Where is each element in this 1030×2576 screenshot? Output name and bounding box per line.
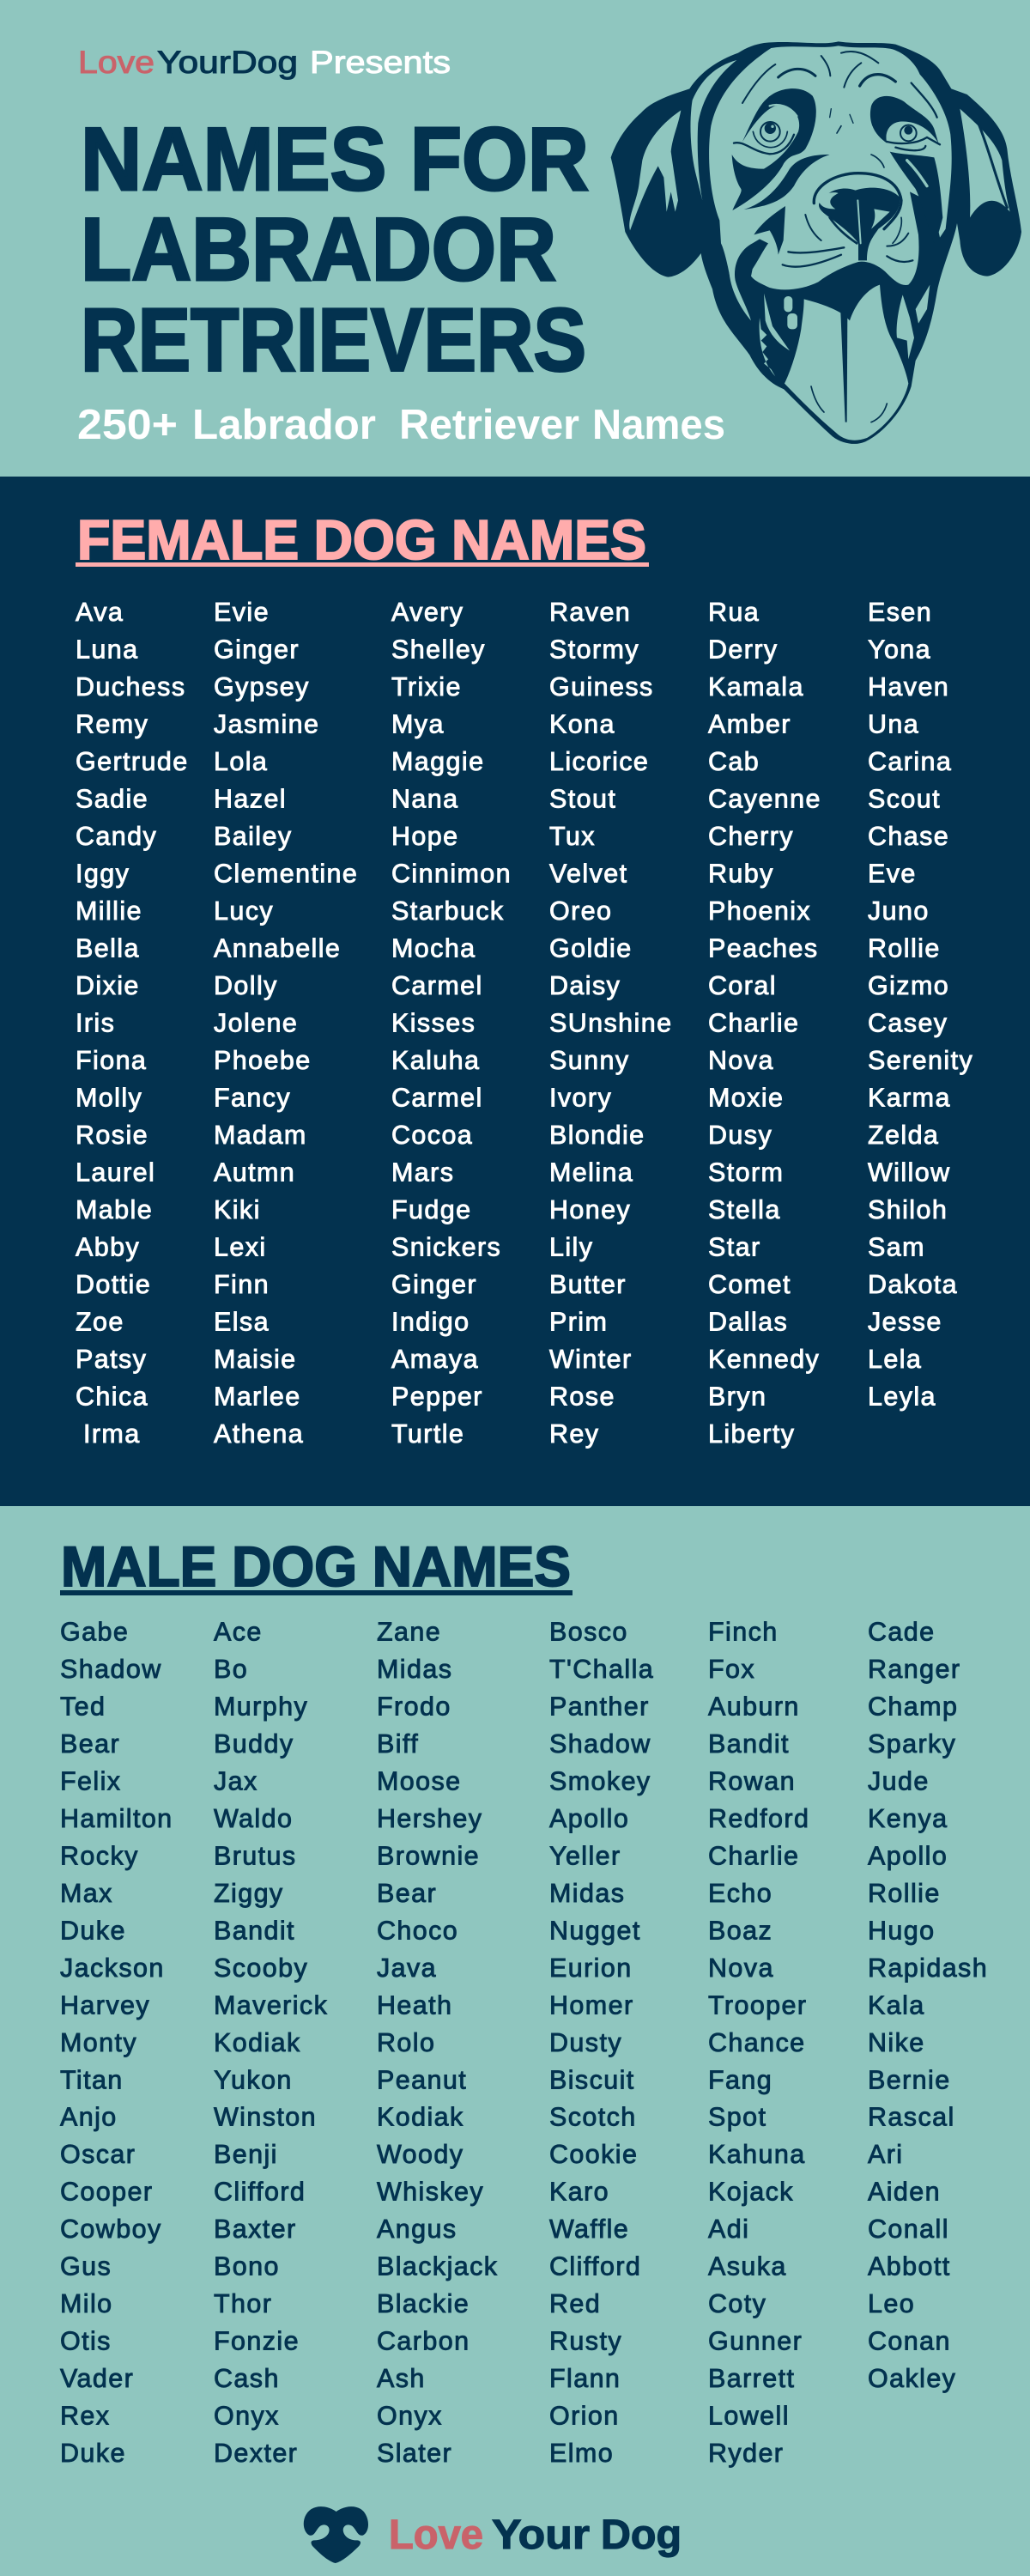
male names column 2: Kodiak	[214, 2028, 301, 2057]
male names column 6: Hugo	[868, 1916, 936, 1945]
male names column 2: Onyx	[214, 2402, 280, 2431]
female names column 6: Una	[868, 709, 919, 738]
female names column 1: Irma	[83, 1419, 141, 1449]
male names column 1: Bear	[60, 1729, 120, 1759]
male names column 6: Cade	[868, 1618, 936, 1647]
male names column 4: Rusty	[549, 2327, 622, 2356]
female names column 6: Eve	[868, 859, 917, 888]
footer logo: Love Your Dog	[304, 2506, 682, 2563]
female names column 5: Comet	[708, 1270, 791, 1299]
male names column 6: Champ	[868, 1692, 958, 1721]
female names column 4: Daisy	[549, 971, 621, 1000]
female names column 2: Finn	[214, 1270, 270, 1299]
female names column 1: Chica	[76, 1382, 148, 1412]
female names column 5: Cherry	[708, 822, 794, 851]
male names column 1: Monty	[60, 2028, 137, 2057]
male names column 3: Zane	[377, 1618, 441, 1647]
female names column 3: Starbuck	[391, 896, 505, 926]
female names column 4: Stout	[549, 785, 616, 814]
female names column 4: Stormy	[549, 635, 639, 665]
female names column 4: Oreo	[549, 896, 612, 926]
male names column 2: Winston	[214, 2103, 317, 2132]
male names column 6: Apollo	[868, 1841, 948, 1870]
female names column 4: Goldie	[549, 934, 633, 963]
male names column 5: Kojack	[708, 2178, 794, 2207]
female names column 3: Snickers	[391, 1233, 501, 1262]
female names column 5: Phoenix	[708, 896, 811, 926]
male names column 6: Leo	[868, 2289, 915, 2318]
female names column 2: Annabelle	[214, 934, 341, 963]
male names column 2: Bono	[214, 2252, 280, 2281]
male names column 6: Jude	[868, 1766, 930, 1795]
male names column 5: Redford	[708, 1804, 809, 1833]
male names column 5: Trooper	[708, 1990, 807, 2020]
male names column 1: Vader	[60, 2364, 134, 2393]
male names column 5: Finch	[708, 1618, 779, 1647]
male names column 3: Woody	[377, 2140, 464, 2169]
male names column 3: Choco	[377, 1916, 458, 1945]
male names column 4: Homer	[549, 1990, 634, 2020]
female names column 2: Madam	[214, 1121, 307, 1150]
subtitle	[77, 402, 725, 448]
male names column 4: Red	[549, 2289, 601, 2318]
female names column 5: Derry	[708, 635, 779, 665]
male names column 1: Max	[60, 1879, 113, 1908]
title: RETRIEVERS	[81, 290, 586, 390]
female names column 5: Ruby	[708, 859, 774, 888]
female names column 3: Fudge	[391, 1195, 471, 1224]
female names column 2: Lola	[214, 747, 268, 776]
male names column 3: Frodo	[377, 1692, 451, 1721]
male names column 3: Rolo	[377, 2028, 435, 2057]
female names column 6: Gizmo	[868, 971, 949, 1000]
panel: female dog names	[0, 477, 1030, 1506]
female names column 1: Remy	[76, 709, 148, 738]
female names column 6: Rollie	[868, 934, 941, 963]
logo wordmark: Your	[492, 2512, 590, 2558]
female names column 5: Rua	[708, 598, 760, 627]
female names column 1: Ava	[76, 598, 124, 627]
female names column 6: Karma	[868, 1084, 951, 1113]
brand line: LoveYourDog Presents	[78, 45, 451, 80]
male names column 5: Barrett	[708, 2364, 795, 2393]
title: LABRADOR	[81, 200, 556, 300]
female names column 5: Kamala	[708, 672, 804, 702]
male names column 5: Coty	[708, 2289, 766, 2318]
male names column 2: Bandit	[214, 1916, 295, 1945]
female names column 6: Esen	[868, 598, 932, 627]
female names column 1: Duchess	[76, 672, 185, 702]
male names column 1: Harvey	[60, 1990, 150, 2020]
female names column 1: Zoe	[76, 1307, 124, 1336]
male names column 6: Nike	[868, 2028, 925, 2057]
male names column 2: Murphy	[214, 1692, 308, 1721]
female names column 6: Willow	[868, 1157, 951, 1187]
female names column 1: Mable	[76, 1195, 153, 1224]
male names column 4: Clifford	[549, 2252, 641, 2281]
male names column 3: Onyx	[377, 2402, 443, 2431]
male names column 4: Smokey	[549, 1766, 651, 1795]
female names column 2: Lexi	[214, 1233, 267, 1262]
male names column 1: Cowboy	[60, 2215, 162, 2244]
female names column 3: Mya	[391, 709, 445, 738]
subtitle: Names	[592, 402, 725, 448]
heading: male dog names: MALE DOG NAMES	[61, 1534, 571, 1598]
title: NAMES FOR	[81, 110, 589, 210]
male names column 3: Hershey	[377, 1804, 482, 1833]
female names column 2: Jasmine	[214, 709, 319, 738]
female names column 6: Lela	[868, 1345, 922, 1374]
female names column 1: Millie	[76, 896, 142, 926]
male names column 4: Cookie	[549, 2140, 638, 2169]
male names column 2: Ziggy	[214, 1879, 284, 1908]
male names column 6: Conall	[868, 2215, 949, 2244]
female names column 5: Liberty	[708, 1419, 795, 1449]
male names column 6: Rascal	[868, 2103, 955, 2132]
male names column 2: Baxter	[214, 2215, 297, 2244]
female names column 1: Abby	[76, 1233, 140, 1262]
male names column 1: Titan	[60, 2065, 124, 2094]
female names column 3: Turtle	[391, 1419, 464, 1449]
male names column 4: Orion	[549, 2402, 620, 2431]
female names column 2: Phoebe	[214, 1046, 312, 1075]
female names column 6: Dakota	[868, 1270, 958, 1299]
female names column 1: Luna	[76, 635, 138, 665]
female names column 6: Scout	[868, 785, 941, 814]
brand line: LoveYourDog Presents: Love	[78, 45, 154, 80]
female names column 4: Sunny	[549, 1046, 629, 1075]
female names column 3: Trixie	[391, 672, 462, 702]
female names column 2: Clementine	[214, 859, 358, 888]
female names column 6: Juno	[868, 896, 930, 926]
male names column 5: Nova	[708, 1953, 774, 1983]
male names column 3: Angus	[377, 2215, 457, 2244]
female names column 6: Sam	[868, 1233, 925, 1262]
female names column 1: Iggy	[76, 859, 130, 888]
male names column 6: Kenya	[868, 1804, 948, 1833]
female names column 5: Cab	[708, 747, 760, 776]
logo wordmark: Dog	[601, 2512, 682, 2558]
female names column 6: Shiloh	[868, 1195, 948, 1224]
male names column 2: Clifford	[214, 2178, 306, 2207]
male names column 2: Maverick	[214, 1990, 328, 2020]
female names column 3: Kaluha	[391, 1046, 480, 1075]
male names column 1: Felix	[60, 1766, 121, 1795]
male names column 1: Gus	[60, 2252, 112, 2281]
male names column 5: Fox	[708, 1655, 755, 1684]
male names column 4: T'Challa	[549, 1655, 654, 1684]
female names column 1: Fiona	[76, 1046, 147, 1075]
male names column 5: Chance	[708, 2028, 806, 2057]
male names column 2: Thor	[214, 2289, 272, 2318]
female names column 4: Blondie	[549, 1121, 645, 1150]
female names column 5: Storm	[708, 1157, 784, 1187]
male names column 6: Conan	[868, 2327, 951, 2356]
male names column 4: Dusty	[549, 2028, 622, 2057]
male names column 6: Oakley	[868, 2364, 956, 2393]
male names column 3: Blackie	[377, 2289, 470, 2318]
female names column 2: Athena	[214, 1419, 304, 1449]
brand line: LoveYourDog Presents: YourDog	[157, 45, 298, 80]
male names column 6: Ranger	[868, 1655, 960, 1684]
male names column 5: Echo	[708, 1879, 772, 1908]
female names column 1: Patsy	[76, 1345, 147, 1374]
male names column 5: Kahuna	[708, 2140, 806, 2169]
female names column 3: Maggie	[391, 747, 484, 776]
male names column 5: Ryder	[708, 2439, 784, 2468]
female names column 4: Melina	[549, 1157, 633, 1187]
male names column 4: Apollo	[549, 1804, 629, 1833]
male names column 5: Asuka	[708, 2252, 787, 2281]
female names column 6: Serenity	[868, 1046, 973, 1075]
male names column 4: Nugget	[549, 1916, 641, 1945]
female names column 2: Autmn	[214, 1157, 295, 1187]
male names column 3: Java	[377, 1953, 437, 1983]
male names column 6: Kala	[868, 1990, 925, 2020]
male names column 5: Gunner	[708, 2327, 803, 2356]
male names column 5: Lowell	[708, 2402, 790, 2431]
female names column 4: Butter	[549, 1270, 627, 1299]
male names column 2: Ace	[214, 1618, 263, 1647]
male names column 1: Milo	[60, 2289, 113, 2318]
male names column 2: Waldo	[214, 1804, 293, 1833]
female names column 3: Ginger	[391, 1270, 477, 1299]
male names column 1: Hamilton	[60, 1804, 173, 1833]
male names column 6: Rapidash	[868, 1953, 988, 1983]
female names column 5: Kennedy	[708, 1345, 820, 1374]
female names column 1: Dottie	[76, 1270, 151, 1299]
male names column 5: Charlie	[708, 1841, 799, 1870]
female names column 1: Dixie	[76, 971, 140, 1000]
male names column 4: Yeller	[549, 1841, 621, 1870]
female names column 4: Rey	[549, 1419, 599, 1449]
subtitle: Retriever	[399, 402, 579, 448]
female names column 4: Honey	[549, 1195, 631, 1224]
female names column 4: Raven	[549, 598, 631, 627]
female names column 2: Marlee	[214, 1382, 301, 1412]
male names column 1: Otis	[60, 2327, 112, 2356]
female names column 3: Kisses	[391, 1008, 476, 1037]
male names column 2: Yukon	[214, 2065, 293, 2094]
female names column 3: Hope	[391, 822, 459, 851]
male names column 5: Boaz	[708, 1916, 772, 1945]
male names column 4: Elmo	[549, 2439, 614, 2468]
heading: female dog names: FEMALE DOG NAMES	[77, 508, 646, 571]
female names column 4: Lily	[549, 1233, 593, 1262]
female names column 2: Elsa	[214, 1307, 270, 1336]
female names column 1: Sadie	[76, 785, 148, 814]
female names column 2: Ginger	[214, 635, 300, 665]
female names column 3: Mars	[391, 1157, 454, 1187]
male names column 3: Carbon	[377, 2327, 470, 2356]
female names column 4: Ivory	[549, 1084, 612, 1113]
male names column 4: Karo	[549, 2178, 609, 2207]
male names column 2: Dexter	[214, 2439, 298, 2468]
panel: male dog names	[60, 1534, 988, 2468]
male names column 6: Sparky	[868, 1729, 956, 1759]
male names column 4: Shadow	[549, 1729, 651, 1759]
male names column 6: Rollie	[868, 1879, 941, 1908]
female names column 3: Cocoa	[391, 1121, 473, 1150]
female names column 1: Molly	[76, 1084, 142, 1113]
male names column 3: Bear	[377, 1879, 437, 1908]
subtitle: Labrador	[192, 402, 376, 448]
female names column 2: Hazel	[214, 785, 287, 814]
female names column 5: Star	[708, 1233, 761, 1262]
male names column 1: Anjo	[60, 2103, 118, 2132]
female names column 3: Cinnimon	[391, 859, 512, 888]
female names column 1: Iris	[76, 1008, 115, 1037]
male names column 3: Ash	[377, 2364, 426, 2393]
female names column 2: Fancy	[214, 1084, 291, 1113]
male names column 1: Shadow	[60, 1655, 162, 1684]
male names column 3: Brownie	[377, 1841, 480, 1870]
logo wordmark: Love	[389, 2512, 483, 2558]
female names column 6: Zelda	[868, 1121, 939, 1150]
female names column 5: Amber	[708, 709, 791, 738]
male names column 5: Bandit	[708, 1729, 790, 1759]
male names column 6: Ari	[868, 2140, 903, 2169]
female names column 5: Bryn	[708, 1382, 766, 1412]
female names column 1: Laurel	[76, 1157, 155, 1187]
female names column 3: Carmel	[391, 971, 483, 1000]
female names column 3: Amaya	[391, 1345, 479, 1374]
female names column 6: Leyla	[868, 1382, 936, 1412]
subtitle: 250+	[77, 402, 178, 448]
male names column 3: Heath	[377, 1990, 452, 2020]
female names column 1: Candy	[76, 822, 157, 851]
male names column 3: Biff	[377, 1729, 419, 1759]
female names column 3: Nana	[391, 785, 459, 814]
female names column 4: Winter	[549, 1345, 633, 1374]
male names column 1: Rocky	[60, 1841, 139, 1870]
female names column 4: Kona	[549, 709, 615, 738]
female names column 5: Dusy	[708, 1121, 772, 1150]
female names column 6: Jesse	[868, 1307, 942, 1336]
male names column 1: Duke	[60, 2439, 126, 2468]
female names column 5: Peaches	[708, 934, 819, 963]
male names column 4: Waffle	[549, 2215, 629, 2244]
female names column 4: SUnshine	[549, 1008, 672, 1037]
female names column 4: Guiness	[549, 672, 654, 702]
female names column 5: Dallas	[708, 1307, 788, 1336]
male names column 2: Buddy	[214, 1729, 294, 1759]
female names column 5: Charlie	[708, 1008, 799, 1037]
male names column 1: Ted	[60, 1692, 106, 1721]
male names column 2: Brutus	[214, 1841, 297, 1870]
male names column 3: Midas	[377, 1655, 452, 1684]
female names column 3: Pepper	[391, 1382, 483, 1412]
male names column 5: Fang	[708, 2065, 772, 2094]
female names column 2: Bailey	[214, 822, 292, 851]
male names column 3: Blackjack	[377, 2252, 498, 2281]
male names column 6: Aiden	[868, 2178, 941, 2207]
logo wordmark	[389, 2512, 682, 2558]
male names column 4: Midas	[549, 1879, 625, 1908]
male names column 1: Rex	[60, 2402, 110, 2431]
female names column 6: Haven	[868, 672, 949, 702]
female names column 3: Avery	[391, 598, 464, 627]
male names column 5: Rowan	[708, 1766, 796, 1795]
female names column 2: Maisie	[214, 1345, 297, 1374]
female names column 5: Coral	[708, 971, 777, 1000]
female names column 6: Chase	[868, 822, 949, 851]
male names column 2: Benji	[214, 2140, 278, 2169]
female names column 3: Mocha	[391, 934, 476, 963]
female names column 5: Moxie	[708, 1084, 784, 1113]
male names column 2: Jax	[214, 1766, 258, 1795]
male names column 4: Biscuit	[549, 2065, 635, 2094]
female names column 2: Jolene	[214, 1008, 298, 1037]
male names column 2: Cash	[214, 2364, 280, 2393]
male names column 6: Abbott	[868, 2252, 951, 2281]
female names column 4: Rose	[549, 1382, 615, 1412]
female names column 6: Casey	[868, 1008, 948, 1037]
male names column 3: Moose	[377, 1766, 462, 1795]
female names column 2: Kiki	[214, 1195, 261, 1224]
female names column 5: Nova	[708, 1046, 774, 1075]
male names column 4: Eurion	[549, 1953, 633, 1983]
female names column 2: Dolly	[214, 971, 278, 1000]
female names column 1: Gertrude	[76, 747, 189, 776]
male names column 3: Whiskey	[377, 2178, 484, 2207]
panel background	[0, 477, 1030, 1506]
female names column 5: Cayenne	[708, 785, 821, 814]
female names column 4: Prim	[549, 1307, 608, 1336]
female names column 4: Tux	[549, 822, 596, 851]
female names column 2: Evie	[214, 598, 270, 627]
female names column 4: Licorice	[549, 747, 649, 776]
female names column 1: Bella	[76, 934, 140, 963]
male names column 3: Peanut	[377, 2065, 467, 2094]
male names column 4: Bosco	[549, 1618, 628, 1647]
male names column 4: Panther	[549, 1692, 650, 1721]
icon: labrador dog head illustration	[611, 41, 1021, 444]
male names column 1: Duke	[60, 1916, 126, 1945]
male names column 5: Adi	[708, 2215, 749, 2244]
header section	[77, 41, 1021, 448]
female names column 3: Indigo	[391, 1307, 470, 1336]
male names column 1: Cooper	[60, 2178, 153, 2207]
brand line: LoveYourDog Presents: Presents	[310, 45, 451, 80]
male names column 2: Scooby	[214, 1953, 308, 1983]
female names column 5: Stella	[708, 1195, 781, 1224]
male names column 2: Bo	[214, 1655, 248, 1684]
male names column 1: Gabe	[60, 1618, 129, 1647]
female names column 2: Lucy	[214, 896, 274, 926]
icon: heart with dog nose	[304, 2506, 368, 2563]
male names column 1: Oscar	[60, 2140, 136, 2169]
male names column 5: Auburn	[708, 1692, 800, 1721]
male names column 2: Fonzie	[214, 2327, 300, 2356]
female names column 2: Gypsey	[214, 672, 310, 702]
female names column 1: Rosie	[76, 1121, 148, 1150]
title	[81, 110, 589, 390]
male names column 3: Slater	[377, 2439, 452, 2468]
male names column 5: Spot	[708, 2103, 766, 2132]
female names column 4: Velvet	[549, 859, 628, 888]
male names column 4: Scotch	[549, 2103, 637, 2132]
female names column 3: Carmel	[391, 1084, 483, 1113]
male names column 4: Flann	[549, 2364, 621, 2393]
male names column 6: Bernie	[868, 2065, 951, 2094]
female names column 3: Shelley	[391, 635, 486, 665]
female names column 6: Carina	[868, 747, 952, 776]
male names column 1: Jackson	[60, 1953, 165, 1983]
female names column 6: Yona	[868, 635, 931, 665]
male names column 3: Kodiak	[377, 2103, 464, 2132]
